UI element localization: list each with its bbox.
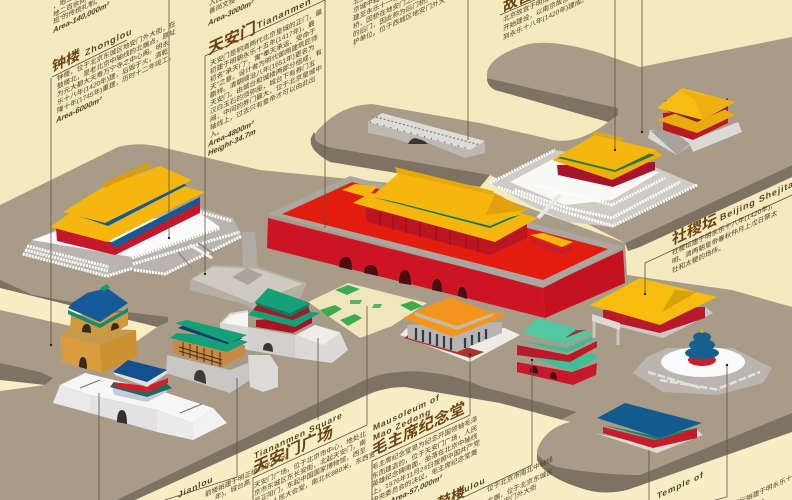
lower roof bbox=[353, 193, 538, 242]
ground plate: right edge side bbox=[625, 165, 792, 251]
building: stone bridge bbox=[368, 113, 485, 158]
text block: Mausoleum of Mao Zedong: 毛主席纪念堂 bbox=[372, 398, 465, 460]
red wall front bbox=[267, 218, 545, 318]
text block: Beijing Shejitan: 社稷坛 bbox=[672, 210, 717, 249]
text block: Tiananmen gate: 天安门 bbox=[208, 18, 256, 59]
building: Taihedian hall on left bbox=[22, 162, 242, 278]
text block rules bbox=[52, 0, 535, 77]
building: hall on white terrace bbox=[490, 131, 697, 227]
text block: Tiananmen Square bbox=[253, 410, 375, 500]
text block: Mausoleum of Mao Zedong: 毛主席纪念堂是为纪念开国领袖毛泽 bbox=[372, 414, 477, 472]
ground plate: left band side bbox=[0, 280, 168, 327]
paifang gate bbox=[592, 314, 620, 345]
monument column bbox=[242, 232, 258, 268]
ground plate: upper right notch side bbox=[487, 78, 618, 122]
text block: Tiananmen Square: Tiananmen Square bbox=[254, 410, 343, 461]
text block: Tiananmen gate: 入。 bbox=[210, 126, 223, 140]
building: far right yellow roof pavilion bbox=[648, 88, 742, 155]
text block: Beijing Shejitan: 明、清两朝皇帝春秋仲月上戊日祭太 bbox=[672, 208, 777, 266]
building: Drum tower with orange base bbox=[60, 284, 137, 373]
text block: Zhonglou bell tower: 鼓楼北，是老北京中轴线的北端点，原址 bbox=[57, 27, 176, 91]
text block: Tiananmen gate: 天安门是明清两代北京皇城的正门，最 bbox=[210, 7, 322, 68]
cream wedge lower left bbox=[0, 380, 45, 391]
text block: Zhonglou bell tower bbox=[52, 19, 176, 125]
text block: Mausoleum of Mao Zedong: Mausoleum of bbox=[373, 392, 440, 433]
upper roof bbox=[372, 172, 527, 226]
text block: Tiananmen gate: Area-4800m² bbox=[207, 119, 254, 149]
text block: Tiananmen gate: 天安门。由城台和城楼两部分组成，有 bbox=[210, 47, 322, 108]
text block: Mausoleum of Mao Zedong: 上。1976年11月24日按照中国共产党 bbox=[372, 438, 480, 497]
text block: Tiananmen gate: 初名"承天门"，寓"奉天承运、受命于 bbox=[210, 26, 316, 84]
text block: Zhonglou bell tower: 隆十年(1745年)重建，历时十二年竣工。 bbox=[57, 51, 175, 115]
text block: Zhonglou bell tower: 钟楼，位于北京东城区地安门外大街，在 bbox=[57, 19, 176, 83]
text block: Zhonglou bell tower: 乐十八年(1420年)建，后毁于火，清乾 bbox=[57, 46, 168, 107]
text block: Tiananmen gate: 阙，中间的券门最大，位于北京皇城中 bbox=[210, 63, 322, 124]
text block: Mausoleum of Mao Zedong: Mao Zedong bbox=[373, 406, 431, 443]
building: Tiananmen red gate bbox=[267, 167, 625, 318]
square ground bbox=[308, 283, 427, 338]
text block: Mausoleum of Mao Zedong: 东而建造的，位于天安门广场，人民 bbox=[372, 423, 477, 481]
text block: Tiananmen gate bbox=[207, 0, 322, 158]
red floor bbox=[282, 182, 608, 280]
cream wedge left bbox=[0, 288, 157, 341]
text block: Gulou bbox=[437, 454, 553, 500]
green band bbox=[372, 197, 520, 228]
text block: Tiananmen Square: 天安门广场 bbox=[253, 422, 333, 478]
text block: Tiananmen Square: 京市东城区东长安街，北起天安门，南 bbox=[254, 437, 366, 498]
text block: Tiananmen gate: 天"之意。设计者为明代御用建筑匠师 bbox=[210, 33, 318, 92]
text block: Mausoleum of Mao Zedong: 英雄纪念碑南面，坐落在北京中轴线 bbox=[372, 431, 477, 489]
ground plate: main grey surface bbox=[0, 144, 792, 500]
text block: Beijing Shejitan: 社和太稷的场所。 bbox=[672, 242, 725, 275]
cream lower text area bbox=[135, 387, 792, 500]
text block: Tiananmen gate: Height-34.7m bbox=[208, 127, 256, 158]
building: Temple of Heaven bbox=[633, 329, 772, 395]
text block: Gulou: 位于北京市南北中轴线 bbox=[487, 454, 553, 494]
building: white gate with blue roof bbox=[53, 360, 227, 440]
monument terrace bbox=[190, 232, 307, 310]
text block: Beijing Shejitan: 社稷坛建于明永乐十八年(1420年)， bbox=[672, 199, 777, 257]
text block: Temple of Heaven: Temple of bbox=[657, 469, 704, 500]
ground plate: upper grey surface bbox=[315, 37, 792, 243]
building: blue roof hall bbox=[595, 403, 703, 453]
text block: Tiananmen gate: 初建于明朝永乐十五年(1417年)，最 bbox=[210, 18, 315, 76]
text block: Zhonglou bell tower: 钟楼 bbox=[52, 45, 80, 76]
small side pavilions bbox=[342, 184, 378, 197]
ground plate: upper band side bbox=[311, 132, 490, 187]
building: Qianmen green roof tower bbox=[220, 288, 348, 363]
building: Shejitan hall with yellow roof bbox=[590, 278, 717, 338]
text block: Tiananmen gate: 汉白玉石的须弥座，城台下有券门五 bbox=[210, 58, 315, 116]
parapet bbox=[268, 176, 624, 288]
text block: Zhonglou bell tower: Zhonglou bbox=[85, 26, 132, 59]
gate arches bbox=[339, 257, 467, 299]
hall body bbox=[365, 208, 527, 255]
text block: Beijing Shejitan bbox=[672, 176, 792, 275]
text block: Gulou: Gulou bbox=[457, 475, 485, 498]
text block: Jianlou: Jianlou bbox=[178, 474, 213, 500]
building: Gulou drum tower, green and red bbox=[517, 318, 598, 385]
ground plate: lower side bbox=[117, 371, 792, 500]
text block: Mausoleum of Mao Zedong bbox=[372, 392, 480, 500]
text block: Jianlou: 箭楼始建于明正统四年(1439 bbox=[205, 451, 288, 499]
text block: Tiananmen Square: 天安门广场，位于北京市中心，地处北 bbox=[254, 429, 366, 490]
text block: Zhonglou bell tower: 为元大都大天寿万宁寺之中心阁。明永 bbox=[57, 38, 169, 99]
building: Jianlou gate tower bbox=[166, 320, 278, 393]
building: Mausoleum of Mao bbox=[400, 297, 520, 362]
text block: Zhonglou bell tower: Area-6000m² bbox=[55, 95, 102, 125]
text block: Tiananmen gate: 蒯祥。清朝顺治八年(1651年)更名为 bbox=[210, 42, 315, 100]
red wall side bbox=[543, 250, 625, 318]
text block: Temple of Heaven bbox=[657, 451, 792, 500]
ground plate: lower left notch bbox=[0, 363, 53, 385]
text block: Tiananmen gate: 轴线上，过去只有皇帝才可以由此出 bbox=[210, 74, 315, 132]
text block: top left fragment, area 140000: Area-140,000m² bbox=[52, 0, 109, 35]
